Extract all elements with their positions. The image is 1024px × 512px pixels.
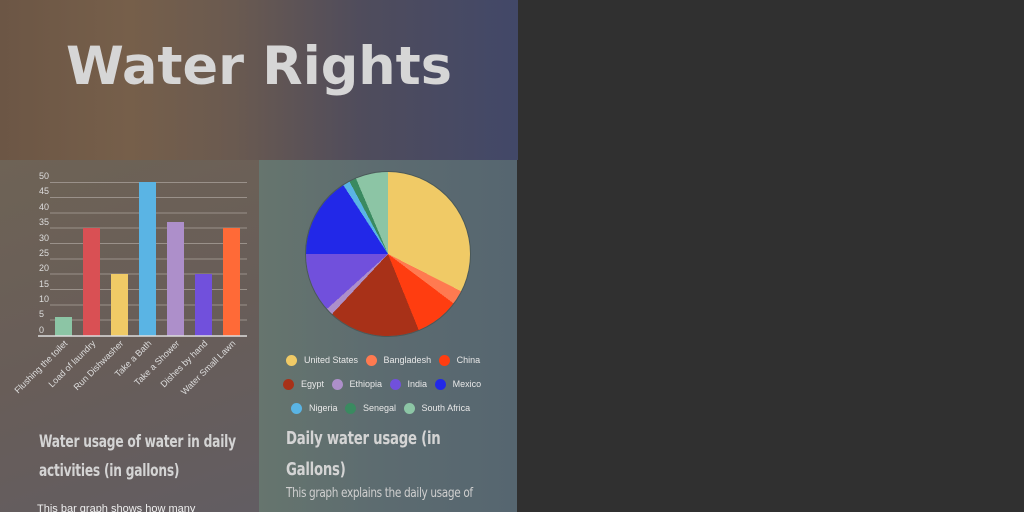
title: Water Rights	[66, 36, 452, 97]
bar chart	[12, 171, 247, 397]
bar chart: 30	[39, 233, 49, 243]
header	[0, 0, 518, 160]
heading: bar chart	[39, 432, 236, 481]
panel: pie chart: Egypt Ethiopia India Mexico	[301, 379, 481, 389]
panel: bar chart	[0, 160, 259, 512]
pie chart	[306, 172, 470, 336]
bar chart: 20	[39, 263, 49, 273]
bar chart: 35	[39, 217, 49, 227]
bar chart: 50	[39, 171, 49, 181]
bar chart: 10	[39, 294, 49, 304]
bar chart: 15	[39, 279, 49, 289]
heading: pie chart	[286, 428, 440, 480]
bar chart: 25	[39, 248, 49, 258]
panel: pie chart	[259, 160, 517, 512]
bar chart: Load of laundry	[46, 338, 98, 389]
bar chart: Run Dishwasher	[72, 338, 125, 392]
bar chart: Take a Shower	[132, 338, 181, 388]
heading: pie chart: Daily water usage (in	[286, 428, 440, 449]
bar chart: 40	[39, 202, 49, 212]
legend	[283, 355, 481, 414]
bar chart: 5	[39, 309, 44, 319]
heading: pie chart: Gallons)	[286, 459, 346, 480]
heading: bar chart: activities (in gallons)	[39, 461, 179, 481]
bar chart: Water Small Lawn	[179, 338, 237, 397]
text: pie description: This graph explains the daily usage of	[286, 486, 473, 501]
heading: bar chart: Water usage of water in daily	[39, 432, 236, 452]
bar chart: 0	[39, 325, 44, 335]
bar chart: 45	[39, 186, 49, 196]
panel: pie chart: Nigeria Senegal South Africa	[309, 403, 470, 413]
bar chart: Flushing the toilet	[12, 338, 70, 395]
panel: pie chart: United States Bangladesh China	[304, 355, 480, 365]
bar chart: Take a Bath	[113, 338, 153, 379]
bar chart: Dishes by hand	[158, 338, 209, 389]
